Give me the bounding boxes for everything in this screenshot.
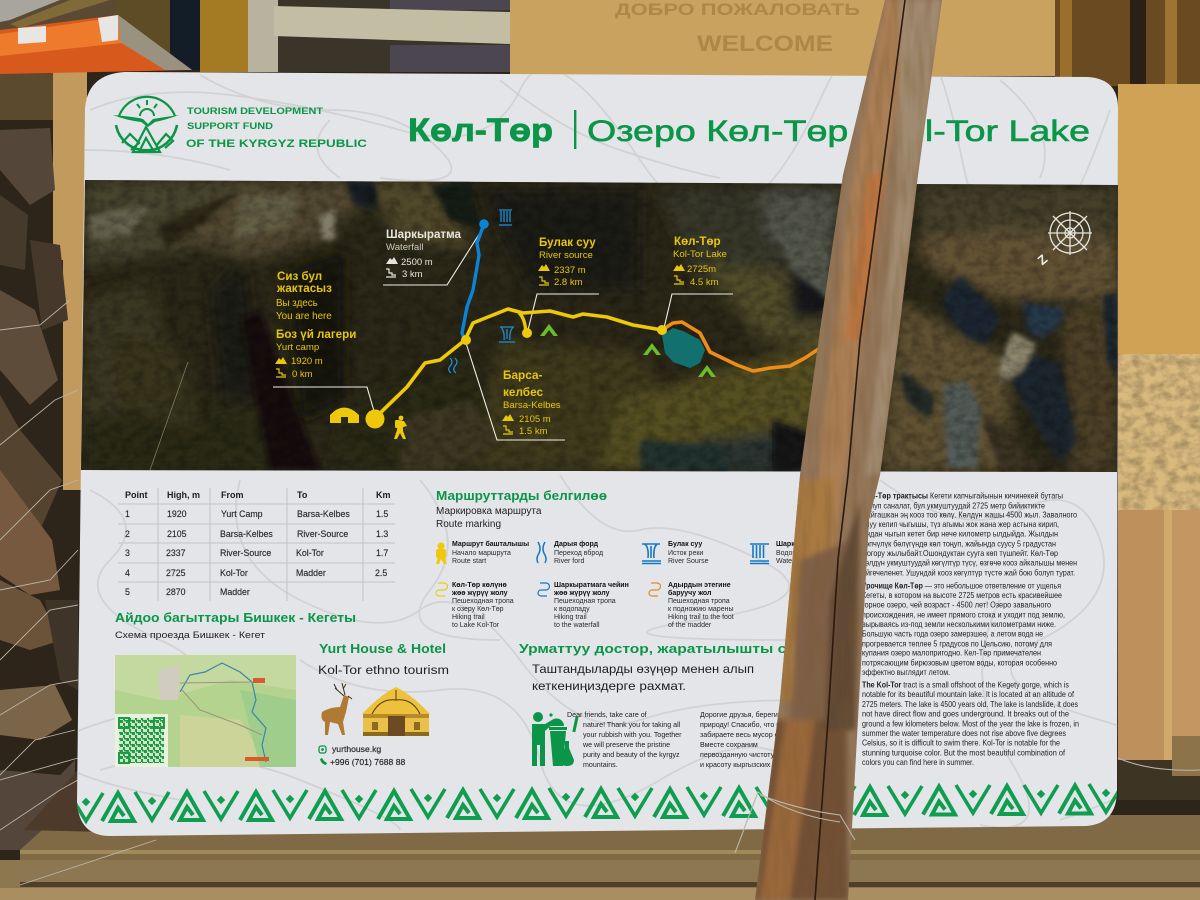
Kyrgyz description: жогору жылыбайт.Ошондуктан суугa көп түшпейт. Көл-Төр — [862, 548, 1058, 558]
compass — [1034, 211, 1092, 268]
English description: summer the water temperature does not rise above five degrees — [862, 728, 1066, 738]
panel: terrain map — [80, 178, 1120, 474]
title: Озеро Көл-Төр | Kol-Tor Lake — [587, 115, 1090, 148]
label: river source: 2.8 km — [554, 277, 583, 288]
route table: River-Source — [220, 548, 271, 558]
route table: Point — [125, 490, 148, 500]
legend: trail to moraine: Адырдын этегине — [668, 582, 731, 589]
Kyrgyz description: көлдүн укмуштуудай көгүлтүр түсү, өзгөчө кооз айкалышы менен — [862, 558, 1077, 568]
Russian description: Большую часть года озеро замерзшее, а летом вода не — [862, 629, 1043, 639]
heading: route marking — [436, 488, 607, 530]
route table: Madder — [296, 568, 326, 578]
route table: Km — [376, 490, 391, 500]
contacts: yurthouse.kg — [332, 744, 381, 754]
stone wall in wire mesh — [0, 128, 156, 885]
Russian description: эффектно выглядит летом. — [862, 667, 950, 677]
label: Barsa-Kelbes: Барса- — [503, 368, 543, 382]
legend: trail to lake: к озеру Көл-Төр — [452, 606, 504, 613]
route table: 2870 — [166, 587, 186, 597]
Yurt House heading — [318, 642, 449, 677]
heading: route marking: Маршруттарды белгилөө — [436, 488, 607, 503]
logo wordmark: SUPPORT FUND — [187, 120, 273, 131]
label: you are here, yurt camp: You are here — [276, 311, 332, 322]
legend: waterfall — [750, 541, 821, 565]
legend: trail to waterfall: Пешеходная тропа — [554, 598, 616, 605]
English message — [567, 711, 682, 769]
logo wordmark: TOURISM DEVELOPMENT — [187, 105, 323, 116]
route table: 1920 — [167, 509, 187, 519]
legend: route start: Начало маршрута — [452, 550, 511, 557]
Kyrgyz description: жайгашкан эң кооз тоо көлү. Көлдүн жашы 4500 жыл. Завалного — [862, 510, 1077, 520]
label: you are here, yurt camp: 0 km — [292, 369, 313, 380]
legend: trail to waterfall: к водопаду — [554, 606, 590, 613]
label: river source: Булак суу — [539, 236, 596, 249]
welcome sign: ДОБРО ПОЖАЛОВАТЬ — [615, 0, 860, 19]
legend: trail to moraine: Hiking trail to the foot — [668, 614, 734, 621]
route table: 5 — [125, 587, 130, 597]
English description: colors you can find here in summer. — [862, 757, 974, 767]
route table: 1.7 — [376, 548, 388, 558]
Russian description: Кегеты, в котором на высоте 2725 метров есть красивейшее — [862, 590, 1062, 600]
English message: Dear friends, take care of — [567, 711, 647, 719]
moraine route (orange) — [662, 322, 820, 371]
heading: driving directions: Схема проезда Бишкек - Кегет — [115, 629, 266, 640]
English message: nature! Thank you for taking all — [583, 721, 681, 729]
title — [408, 110, 1090, 149]
English message: we will preserve the pristine — [582, 741, 670, 749]
label: you are here, yurt camp — [275, 270, 356, 380]
Russian message: Дорогие друзья, берегите — [700, 711, 785, 719]
route table: 2725 — [166, 568, 186, 578]
Russian message: забираете весь мусор с собой. — [700, 731, 802, 739]
label: Kol-Tor lake: Kol-Tor Lake — [673, 249, 727, 260]
terrain noise — [80, 178, 1120, 474]
route table: Yurt Camp — [221, 509, 263, 519]
Russian description: прогревается теплее 5 градусов по Цельсию, потому для — [862, 638, 1052, 648]
route table — [118, 488, 395, 601]
label: waterfall: 3 km — [402, 269, 423, 280]
label: river source — [538, 236, 596, 288]
legend: route start — [436, 540, 529, 565]
English description: The Kol-Tor tract is a small offshoot of the Kegety gorge, which is — [862, 679, 1069, 689]
legend: route start: Маршрут башталышы — [452, 540, 529, 548]
legend: trail to moraine: к подножию марены — [668, 606, 733, 613]
Russian message: природу! Спасибо, что вы — [700, 721, 785, 729]
road map with QR code — [115, 655, 296, 767]
terrain blobs — [85, 180, 1118, 472]
English description: stunning turquoise color. But the most beautiful combination of — [862, 747, 1066, 757]
label: you are here, yurt camp: Сиз бул — [277, 270, 322, 283]
English description: notable for its beautiful mountain lake. It is located at an altitude of — [862, 689, 1075, 699]
waterfall start point — [479, 219, 489, 229]
heading: route marking: Маркировка маршрута — [436, 506, 542, 517]
legend: trail to moraine: баруучу жол — [668, 589, 711, 597]
Russian description: Урочище Көл-Төр — это небольшое ответвление от ущелья — [862, 580, 1061, 590]
legend: trail to lake: Пешеходная тропа — [452, 598, 514, 605]
waterfall route (blue) — [462, 224, 484, 340]
label: waterfall: Waterfall — [386, 242, 424, 253]
route table: 1.5 — [376, 509, 388, 519]
label: you are here, yurt camp: жактасыз — [276, 282, 332, 295]
route table: 1.3 — [376, 529, 388, 539]
label: you are here, yurt camp: 1920 m — [291, 356, 323, 367]
label: Kol-Tor lake — [673, 235, 727, 288]
Russian description: происхождения, не имеет прямого стока и уходит под землю, — [862, 609, 1065, 619]
contacts: +996 (701) 7688 88 — [330, 757, 405, 767]
icon: river source marker — [499, 327, 515, 342]
Russian message — [700, 711, 802, 769]
legend: waterfall: Шаркыратма — [776, 541, 821, 548]
Russian description — [862, 580, 1065, 677]
source branch — [519, 313, 526, 333]
legend: trail to moraine — [649, 582, 734, 629]
label: Barsa-Kelbes: келбес — [503, 385, 543, 399]
compass: Z — [1034, 251, 1050, 268]
Russian message: первозданную чистоту — [700, 751, 775, 759]
route table: Barsa-Kelbes — [220, 529, 273, 539]
main route (yellow) — [375, 309, 662, 418]
road line on terrain — [150, 362, 188, 470]
leader lines — [273, 228, 733, 440]
legend: trail to waterfall: Шаркыратмага чейин — [554, 581, 629, 589]
thank-you message: кеткениңиздерге рахмат. — [532, 679, 686, 693]
label: you are here, yurt camp: Боз үй лагери — [276, 328, 356, 341]
Russian description: вырываясь из-под земли несколькими километрами ниже. — [862, 619, 1056, 629]
legend: trail to lake: to Lake Kol-Tor — [452, 622, 500, 629]
route table: 2337 — [166, 548, 186, 558]
Yurt House heading: Kol-Tor ethno tourism — [318, 663, 449, 677]
Kyrgyz description: улуу келип чыгышы, түз агымы жок жана жер астына кирип, — [862, 519, 1059, 529]
route table: River-Source — [297, 529, 348, 539]
legend: route start: Route start — [452, 558, 486, 565]
label: you are here, yurt camp: Вы здесь — [276, 298, 318, 309]
contacts — [319, 744, 405, 767]
English message: mountains. — [583, 761, 618, 769]
welcome sign — [615, 0, 860, 56]
legend: waterfall: Водопад — [776, 550, 804, 557]
route table: 2105 — [167, 529, 187, 539]
label: Kol-Tor lake: 2725m — [687, 264, 716, 275]
legend: river ford — [537, 541, 603, 565]
Russian message: и красоту кыргызских гор. — [700, 761, 785, 769]
label: waterfall: 2500 m — [401, 257, 433, 268]
label: Barsa-Kelbes: 1.5 km — [519, 426, 548, 437]
legend: trail to waterfall — [538, 581, 629, 629]
legend: trail to lake: Көл-Төр көлүнө — [452, 582, 507, 589]
legend: trail to moraine: Пешеходная тропа — [668, 598, 730, 605]
label: waterfall — [386, 228, 462, 280]
icon: camp tents — [540, 324, 716, 377]
welcome sign: WELCOME — [697, 31, 833, 56]
Kyrgyz description: андан чыгып кетет бир нече километр ылдыйда. Жылдын — [862, 529, 1058, 539]
heading: route marking: Route marking — [436, 519, 501, 530]
route table: 1 — [125, 509, 130, 519]
wooden post — [750, 0, 950, 900]
bottom ornament band — [69, 784, 1123, 821]
logo: tourism development support fund — [113, 97, 179, 152]
orange panel on top left — [0, 0, 192, 74]
icon: hiker — [394, 416, 407, 439]
English description: ground a few kilometers below. Most of the year the lake is frozen, in — [862, 718, 1079, 728]
Russian message: Вместе сохраним — [700, 741, 758, 749]
label: Kol-Tor lake: 4.5 km — [690, 277, 719, 288]
legend: trail to lake — [436, 582, 514, 629]
English description: 2725 meters. The lake is 4500 years old. The lake is landslide, it does — [862, 699, 1078, 709]
legend: trail to moraine: of the madder — [668, 622, 712, 629]
label: river source: 2337 m — [554, 265, 586, 276]
route table: Barsa-Kelbes — [297, 509, 350, 519]
Russian description: потрясающим бирюзовым цветом воды, которая особенно — [862, 657, 1057, 667]
Kyrgyz description: Көл-Төр трактысы Кегети капчыгайынын кичинекей бутагы — [862, 491, 1063, 501]
Kyrgyz description: көпчүлүк бөлүгүндө көл тоңуп, жайында суусу 5 градустан — [862, 538, 1056, 548]
legend: waterfall: Waterfall — [776, 558, 804, 565]
route table: To — [297, 490, 308, 500]
route table: 3 — [125, 548, 130, 558]
label: Barsa-Kelbes — [502, 368, 561, 437]
Kyrgyz description: айгечеленет. Ушундай кооз көгүлтүр түстө жай бою болуп турат. — [862, 567, 1075, 577]
route table: Kol-Tor — [220, 568, 248, 578]
route waypoints — [366, 325, 667, 428]
English description: Celsius, so it is difficult to swim there. Kol-Tor is notable for the — [862, 738, 1060, 748]
icon: river ford marker — [449, 358, 457, 373]
Russian description: горное озеро, чей возраст - 4500 лет! Озеро завального — [862, 600, 1051, 610]
binding wire — [735, 758, 1200, 853]
label: river source: River source — [539, 250, 593, 261]
route table: 4 — [125, 568, 130, 578]
legend: trail to waterfall: Hiking trail — [554, 614, 587, 621]
topographic contour lines — [77, 74, 1118, 830]
legend: trail to waterfall: to the waterfall — [554, 622, 600, 629]
icon: yurt — [362, 687, 430, 736]
Kyrgyz description — [862, 491, 1077, 577]
legend: river ford: Дарыя форд — [554, 541, 599, 548]
label: waterfall: Шаркыратма — [386, 228, 462, 241]
thank-you message: Таштандыларды өзүңөр менен алып — [532, 662, 754, 676]
label: Kol-Tor lake: Көл-Төр — [674, 235, 721, 248]
heading: driving directions: Айдоо багыттары Бишкек - Кегеты — [115, 610, 356, 625]
legend: river ford: Переход вброд — [554, 549, 603, 557]
English description: not have direct flow and goes underground. It breaks out of the — [862, 709, 1069, 719]
Kyrgyz description: болуп саналат, бул укмуштуудай 2725 метр бийиктикте — [862, 500, 1045, 510]
route table: 2.5 — [375, 568, 387, 578]
route table: From — [221, 490, 244, 500]
information board — [77, 72, 1118, 836]
icon: deer — [321, 683, 352, 735]
English message: your rubbish with you. Together — [583, 731, 682, 739]
Yurt House heading: Yurt House & Hotel — [319, 642, 446, 656]
logo wordmark — [186, 105, 367, 150]
icon: waterfall marker — [499, 210, 512, 225]
legend: river source: Исток реки — [668, 550, 703, 557]
route table: High, m — [167, 490, 200, 500]
route table: Kol-Tor — [296, 548, 324, 558]
legend: trail to lake: Hiking trail — [452, 614, 485, 621]
logo wordmark: OF THE KYRGYZ REPUBLIC — [186, 138, 367, 150]
English description — [853, 679, 1079, 767]
icon: person with rubbish bin — [532, 712, 579, 766]
label: Barsa-Kelbes: 2105 m — [519, 414, 551, 425]
English message: purity and beauty of the kyrgyz — [583, 751, 680, 759]
route table: 2 — [125, 529, 130, 539]
legend: river ford: River ford — [554, 558, 584, 565]
legend: river source: Булак суу — [668, 541, 702, 548]
legend: river source: River Sourse — [668, 558, 709, 565]
label: Barsa-Kelbes: Barsa-Kelbes — [503, 400, 561, 411]
title: Көл-Төр — [408, 112, 553, 148]
route table: Madder — [220, 587, 250, 597]
heading: respect nature: Урматтуу достор, жаратылышты сактайлы! — [519, 642, 857, 656]
legend: trail to waterfall: жөө жүрүү жолу — [553, 590, 610, 597]
legend: trail to lake: жөө жүрүү жолу — [451, 590, 508, 597]
icon: yurt camp — [330, 408, 359, 423]
lake — [662, 328, 705, 368]
label: you are here, yurt camp: Yurt camp — [276, 342, 319, 353]
legend: river source — [642, 541, 709, 565]
heading: driving directions — [115, 610, 356, 640]
terrain detail — [90, 180, 1118, 472]
thank-you message — [532, 662, 754, 693]
Russian description: купания озеро малопригодно. Кел-Төр примечателен — [862, 648, 1041, 658]
